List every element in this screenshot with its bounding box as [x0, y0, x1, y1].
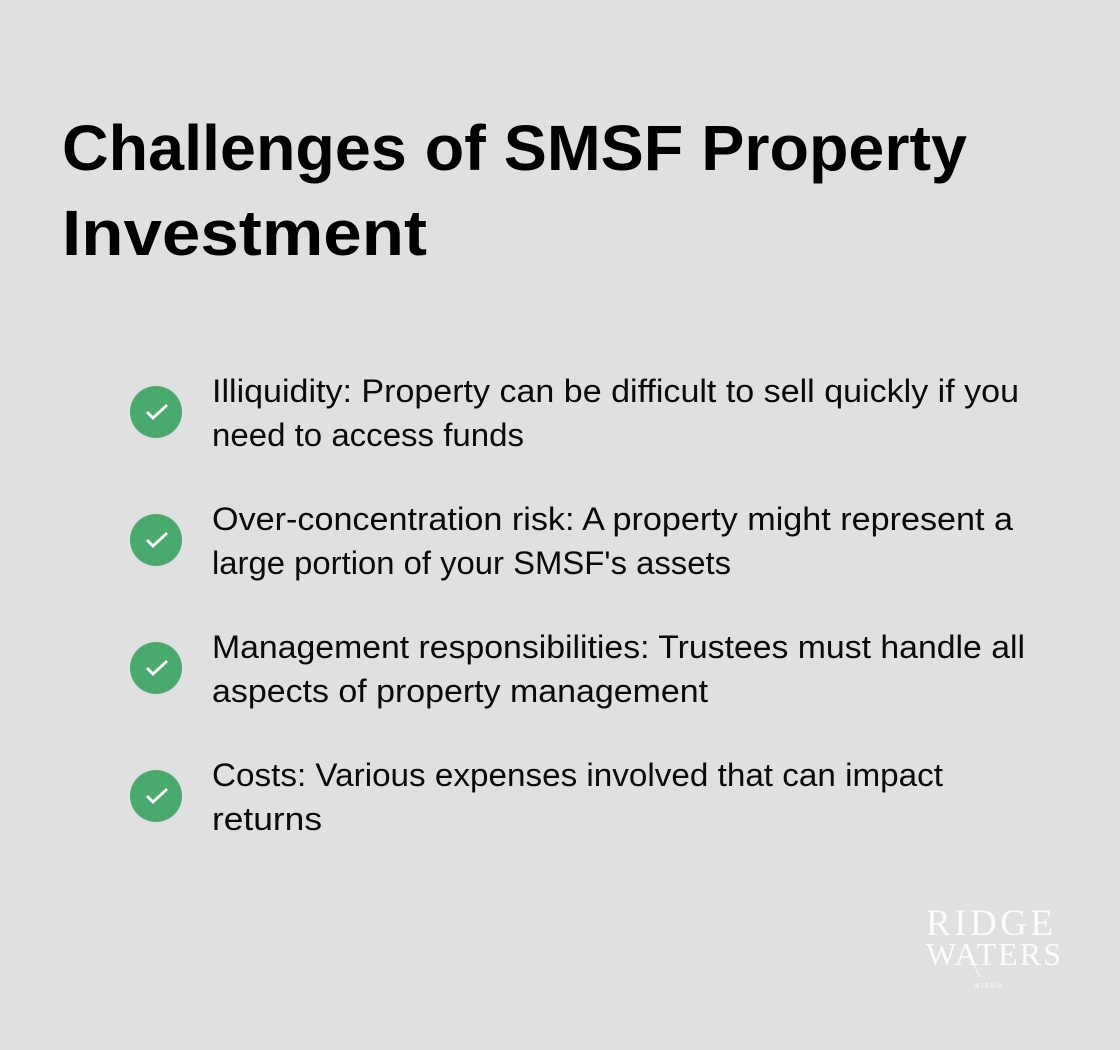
text: over-concentration risk: Over-concentration risk: A property might represent a	[212, 501, 1013, 537]
text: costs: Costs: Various expenses involved that can impact	[212, 757, 943, 793]
logo: Ridge Waters Kiama: RIDGE	[926, 903, 1053, 944]
text: over-concentration risk	[212, 501, 1013, 581]
text: costs: returns	[212, 801, 322, 837]
list item: management responsibilities	[130, 629, 1025, 709]
icon: green check	[130, 770, 182, 822]
text: costs	[212, 757, 943, 837]
title: Investment	[62, 197, 427, 269]
list item: illiquidity	[130, 373, 1019, 453]
title: Challenges of SMSF Property	[62, 112, 967, 184]
text: management responsibilities: aspects of property management	[212, 673, 708, 709]
text: illiquidity: need to access funds	[212, 417, 524, 453]
text: illiquidity	[212, 373, 1019, 453]
icon: green check	[130, 386, 182, 438]
text: over-concentration risk: large portion of your SMSF's assets	[212, 545, 731, 581]
logo: Ridge Waters Kiama: KIAMA	[975, 983, 1002, 990]
text: management responsibilities: Management responsibilities: Trustees must handle all	[212, 629, 1025, 665]
logo: Ridge Waters Kiama	[926, 903, 1061, 990]
icon: green check	[130, 514, 182, 566]
list item: over-concentration risk	[130, 501, 1013, 581]
title	[62, 112, 967, 269]
text: illiquidity: Illiquidity: Property can be difficult to sell quickly if you	[212, 373, 1019, 409]
logo: Ridge Waters Kiama: WATERS	[926, 936, 1061, 972]
icon: green check	[130, 642, 182, 694]
text: management responsibilities	[212, 629, 1025, 709]
list item: costs	[130, 757, 943, 837]
